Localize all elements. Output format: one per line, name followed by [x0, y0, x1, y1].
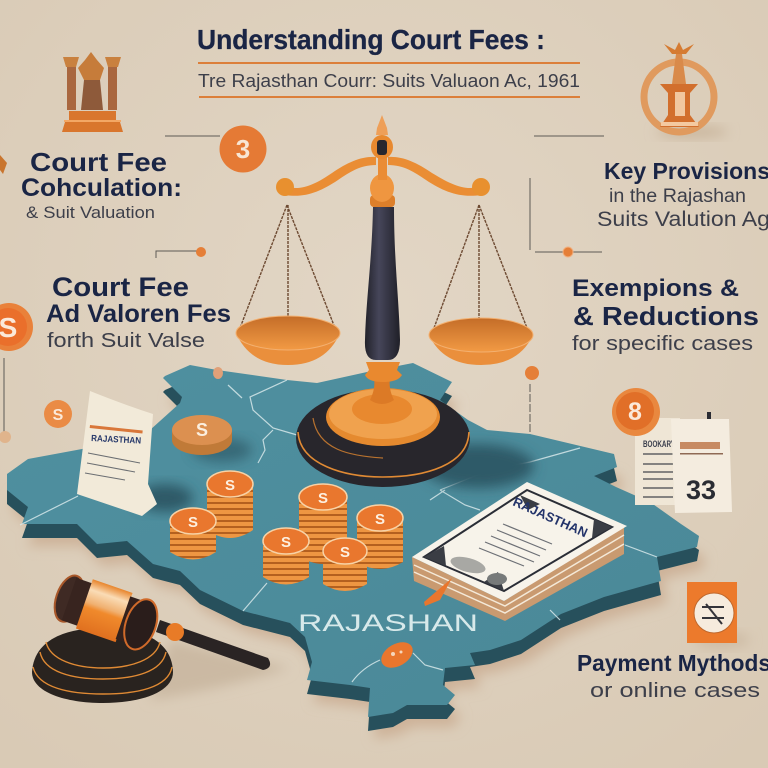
icon: calendar documents — [635, 412, 732, 513]
coin stack 5 — [263, 528, 309, 584]
icon: coin S small: S — [53, 407, 64, 424]
text block: payment methods: or online cases — [590, 680, 760, 702]
icon: small orange marker on map — [377, 637, 417, 673]
map: Rajasthan: RAJASHAN — [298, 610, 478, 637]
text block: ad valorem fees: Court Fee — [52, 272, 189, 302]
subtitle with rules: Tre Rajasthan Courr: Suits Valuaon Ac, 1961 — [198, 71, 580, 91]
text block: ad valorem fees: forth Suit Valse — [47, 330, 205, 352]
icon: calendar documents: BOOKARY — [643, 439, 675, 449]
text block: exemptions and reductions: for specific cases — [572, 333, 753, 355]
coin stack 3: S — [318, 490, 328, 507]
badge: number 3 coin: 3 — [236, 134, 250, 164]
text block: payment methods: Payment Mythods — [577, 650, 768, 676]
coin stack 1: S — [225, 477, 235, 494]
badge: coin on calendar: 8 — [628, 398, 642, 426]
icon: flat coin on map: S — [196, 420, 208, 440]
coin stack 4 — [357, 505, 403, 569]
text block: court fee calculation: Court Fee — [30, 147, 167, 177]
text block: exemptions and reductions: & Reductions — [573, 301, 759, 331]
badge: number 3 coin — [220, 126, 266, 172]
coin stack 3 — [299, 484, 347, 564]
title: Understanding Court Fees : — [197, 24, 545, 55]
text block: payment methods — [577, 650, 768, 702]
coin stack 6: S — [340, 544, 350, 561]
icon: paper document left: RAJASTHAN — [91, 433, 141, 446]
small connector dots — [0, 155, 573, 443]
scale base — [296, 362, 534, 488]
icon: seal ring emblem — [644, 42, 728, 138]
connector lines — [4, 136, 604, 446]
text block: court fee calculation — [21, 147, 182, 222]
right pan — [429, 178, 533, 365]
text block: ad valorem fees: Ad Valoren Fes — [46, 300, 231, 328]
scale beam — [285, 157, 481, 196]
gavel block — [32, 628, 290, 703]
map: Rajasthan — [7, 363, 705, 739]
coin stack 2 — [170, 508, 216, 560]
badge: coin on calendar — [612, 388, 660, 436]
icon: calendar documents: 33 — [686, 475, 716, 505]
icon: court pillars emblem — [62, 52, 123, 132]
coin stack 2: S — [188, 514, 198, 531]
text block: exemptions and reductions: Exempions & — [572, 275, 739, 302]
coin stack 6 — [323, 538, 367, 591]
scale of justice — [236, 115, 534, 488]
icon: coin S small — [44, 400, 72, 428]
icon: certificate stack — [412, 482, 627, 621]
text block: key provisions: Key Provisions — [604, 158, 768, 184]
text block: exemptions and reductions — [572, 275, 759, 355]
coin stack 5: S — [281, 534, 291, 551]
coin stack 4: S — [375, 511, 385, 528]
left pan — [236, 178, 340, 365]
text block: key provisions: Suits Valution Ag — [597, 208, 768, 231]
coin stack 1 — [207, 471, 253, 538]
icon: flat coin on map — [172, 415, 252, 462]
icon: paper document left — [77, 391, 193, 516]
text block: court fee calculation: & Suit Valuation — [26, 203, 155, 222]
icon: gavel — [32, 570, 290, 703]
icon: payment card — [687, 582, 750, 648]
text block: key provisions — [597, 158, 768, 231]
text block: court fee calculation: Cohculation: — [21, 174, 182, 202]
icon: certificate stack: RAJASTHAN — [511, 494, 590, 540]
text block: key provisions: in the Rajashan — [609, 186, 746, 207]
text block: ad valorem fees — [46, 272, 231, 352]
gavel head — [48, 570, 164, 654]
gavel handle — [156, 620, 270, 670]
badge: S coin left — [0, 303, 33, 351]
scale column — [365, 115, 400, 360]
